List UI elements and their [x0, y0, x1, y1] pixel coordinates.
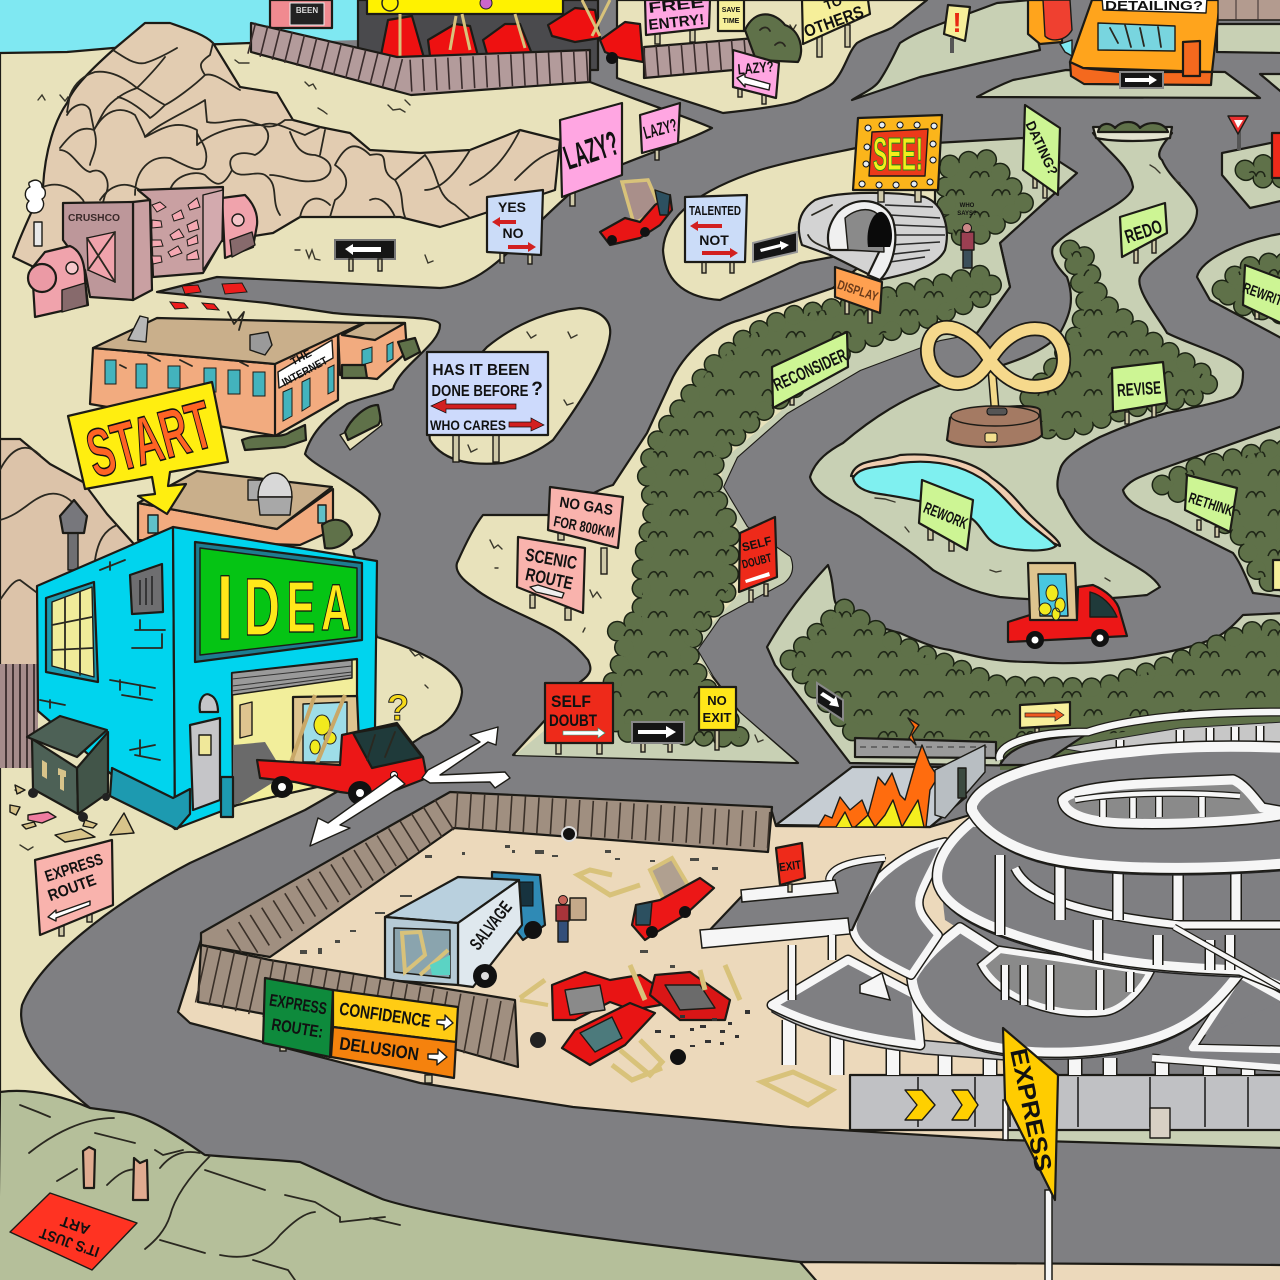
black arrow sign [632, 722, 684, 752]
sign: reconsider: RECONSIDER [770, 345, 850, 395]
mid-road red truck carrying canvas [600, 180, 672, 245]
cream land: west side [0, 43, 712, 1108]
sign: express route pink: ROUTE [46, 872, 99, 905]
sign: small yellow notice: TIME [723, 18, 740, 25]
sign: no gas for 800 km [548, 487, 623, 574]
pale green island under detailing shop [977, 70, 1260, 98]
main upper deck [972, 747, 1280, 920]
idea building [10, 312, 427, 842]
idea sign: D [244, 562, 280, 653]
tunnel drum [799, 193, 947, 280]
sign: display [835, 267, 882, 323]
crusher: CRUSHCO box: CRUSHCO [68, 213, 120, 224]
sign: has it been done before: DONE BEFORE [432, 383, 529, 400]
salvage yard front fence [198, 945, 518, 1067]
sand lot with fire and salvage yard [178, 795, 1020, 1140]
fallen sign: it's just art [10, 1193, 137, 1270]
detailing shop [1028, 0, 1220, 88]
rear deck [1000, 712, 1280, 770]
sign: yield [1228, 116, 1248, 150]
sign: rethink: RETHINK [1186, 490, 1235, 520]
island: rethink [1123, 425, 1280, 597]
wooden frame on the sand [762, 1072, 832, 1105]
window [46, 582, 98, 682]
observatory building behind idea [138, 471, 352, 548]
sign: free entry [645, 0, 710, 44]
sign: exclamation: ! [952, 7, 962, 38]
red truck at start [257, 723, 427, 805]
sign: talented not [685, 195, 747, 273]
fallen sign: it's just art: ART [58, 1212, 92, 1238]
painting on red truck [290, 695, 360, 768]
white road arrows [310, 727, 510, 846]
sand strip bottom right [800, 1262, 1280, 1280]
truck with canvas on the loop [1008, 563, 1127, 649]
hedge: rewrite [1222, 260, 1280, 315]
deck three with opening [912, 928, 1240, 1059]
hedge: tunnel [944, 158, 1025, 236]
sign: free entry: ENTRY! [648, 11, 705, 34]
verge detail lines [20, 1105, 400, 1280]
person by tunnel [957, 203, 977, 268]
salvage worker [556, 896, 586, 942]
sign: small yellow notice: SAVE [722, 7, 741, 14]
hedge: rethink [1162, 446, 1280, 585]
sign: has it been done before: ? [531, 379, 543, 400]
idea sign [195, 542, 362, 662]
sign: self doubt small: SELF [741, 534, 773, 554]
sign: scenic route: SCENIC [524, 544, 579, 573]
sign: revise [1112, 362, 1167, 424]
sign: exit: EXIT [778, 857, 803, 874]
sign: display: DISPLAY [836, 277, 880, 304]
yellow arrow sign [1020, 702, 1070, 736]
dumpster [27, 716, 110, 822]
idea sign: E [286, 568, 316, 648]
sign: no exit: NO [707, 693, 727, 708]
sign: scenic route: ROUTE [524, 564, 575, 594]
left wooden fence [0, 664, 38, 768]
sign: self doubt large: DOUBT [549, 711, 597, 730]
sign: exit [776, 843, 805, 892]
internet building [90, 312, 420, 450]
base trim [110, 768, 190, 829]
sign: revise: REVISE [1116, 377, 1162, 401]
sign: to others [801, 0, 870, 57]
internet building: THE [289, 347, 314, 368]
sign: lazy medium: LAZY? [641, 115, 679, 143]
sign: express route confidence delusion: ROUTE: [270, 1015, 324, 1042]
sign: has it been done before [427, 352, 548, 462]
pale margin right of hedge strip [515, 280, 1008, 762]
salvage yard back fence [201, 792, 772, 957]
express overhead sign [1003, 1028, 1058, 1280]
sign: redo [1120, 203, 1167, 263]
vent [130, 564, 163, 614]
sign: self doubt large [545, 683, 613, 754]
sky [0, 0, 360, 53]
sign: self doubt large: SELF [551, 692, 591, 711]
wreck pile [520, 965, 750, 1080]
yard scattered litter [300, 845, 718, 968]
sign: yes no: NO [502, 225, 524, 241]
deck two [938, 822, 1280, 990]
sign: express route pink [35, 840, 113, 936]
pale strip under highway wall [1005, 1120, 1280, 1148]
hedge: long strip [606, 274, 992, 738]
sign: no exit: EXIT [703, 710, 732, 725]
lamp post [60, 500, 87, 570]
sign: to others: OTHERS [801, 2, 866, 41]
pale green strip north east [1217, 24, 1280, 53]
sign: has it been done before: WHO CARES [430, 417, 506, 433]
sign: scenic route [517, 537, 585, 620]
sign: lazy big: LAZY? [559, 124, 623, 178]
chevrons [905, 1090, 978, 1120]
sign: small yellow notice [718, 0, 744, 31]
concrete wall [850, 1075, 1280, 1138]
green verge bottom left [0, 1091, 820, 1280]
highway interchange [700, 712, 1280, 1138]
top compound: pink booth [270, 0, 332, 28]
fallen sign: it's just art: IT'S JUST [38, 1224, 102, 1260]
sign: no gas for 800 km: NO GAS [558, 494, 614, 519]
top compound: parked red trucks [380, 0, 643, 64]
sign: has it been done before: HAS IT BEEN [432, 362, 530, 379]
wooden frame wreck [578, 870, 640, 895]
planter [1093, 122, 1172, 141]
start sign with arrow [68, 382, 228, 514]
right wall [173, 527, 377, 829]
pond [851, 454, 1060, 550]
sign: lazy big [559, 103, 623, 206]
sign: reconsider [770, 332, 850, 408]
sign: express route confidence delusion: EXPRESS [268, 991, 328, 1018]
internet building: INTERNET [280, 355, 330, 389]
infinity sculpture [927, 327, 1064, 408]
island: pale green behind tunnel [880, 138, 1077, 333]
trash litter [10, 785, 134, 842]
traffic island planter [340, 405, 382, 450]
island: scenic route and long hedge strip [457, 243, 1010, 763]
person by tunnel: SAYS? [957, 211, 977, 217]
garage [232, 659, 357, 806]
island: yield [1222, 140, 1280, 208]
brick marks [40, 560, 165, 760]
broken posts [83, 1147, 148, 1200]
sign: red north east [1272, 133, 1280, 178]
top compound: fence east [644, 38, 756, 78]
top compound: dark hall [358, 0, 598, 70]
door and lamp [190, 694, 233, 817]
sign: express route confidence delusion: DELUSION [338, 1033, 420, 1064]
left hill [0, 439, 135, 700]
sign: see: SEE! [873, 128, 923, 180]
sign: express route confidence delusion: CONFIDENCE [338, 999, 432, 1031]
island: rewrite [1197, 233, 1280, 340]
sign: yes no: YES [498, 199, 526, 215]
deck right low [1152, 975, 1280, 1068]
deck low left [772, 960, 1005, 1060]
small edge sign east [1273, 560, 1280, 590]
sculpture pedestal [947, 406, 1042, 447]
pale green island north [852, 0, 1040, 100]
small black arrow near tunnel [753, 232, 797, 262]
sign: redo: REDO [1122, 217, 1165, 248]
crusher: front motor [28, 222, 88, 317]
sign: lazy small with arrow: LAZY? [737, 58, 774, 79]
sign: rework: REWORK [921, 500, 970, 533]
start sign with arrow: START [79, 387, 220, 493]
grass tufts [15, 25, 1180, 850]
gray fill beneath upper decks [938, 850, 1280, 990]
sign: talented not: NOT [699, 232, 729, 248]
sign: express route confidence delusion [263, 978, 458, 1083]
deck four curved [853, 842, 945, 975]
question mark: ? [387, 687, 409, 728]
sign: self doubt small: DOUBT [741, 550, 773, 571]
top compound: mauve fence [251, 23, 590, 95]
sign: rework [919, 480, 973, 551]
mountain rocks [13, 23, 560, 270]
sign: no gas for 800 km: FOR 800KM [552, 513, 616, 542]
crusher: motor back [222, 195, 257, 258]
cream land: north island [617, 0, 927, 113]
crusher: CRUSHCO box [63, 200, 152, 300]
hedge: revise [1028, 250, 1212, 432]
bush: north [745, 14, 801, 62]
on-ramp [700, 858, 885, 1000]
island: has it been done before [430, 308, 610, 464]
black diagonal arrow sign [817, 683, 843, 720]
island: lower hedge [767, 565, 1280, 770]
sign: dating: DATING? [1022, 118, 1062, 178]
left wall [37, 527, 175, 829]
yard tire [562, 827, 576, 841]
sign: self doubt small [739, 517, 777, 602]
salvage truck: SALVAGE [466, 897, 516, 954]
sign: exclamation [944, 5, 970, 53]
wrecked truck upright [632, 858, 714, 940]
sign: rethink [1185, 475, 1237, 537]
express overhead sign: EXPRESS [1004, 1046, 1057, 1174]
sign: no exit [699, 687, 736, 750]
crusher: perforated hopper [138, 187, 223, 277]
sign: express route pink: EXPRESS [43, 851, 106, 886]
crusher smoke [25, 180, 45, 213]
sign: dating [1022, 105, 1062, 198]
sign: lazy medium [640, 103, 680, 160]
sign: yes no [487, 190, 543, 264]
salvage truck [385, 872, 545, 988]
pillars [789, 1020, 1248, 1075]
black direction arrow: crusher [335, 240, 395, 271]
underpass and fire [776, 718, 996, 827]
fence north east [1218, 0, 1280, 20]
hedge: yield island [1245, 164, 1280, 178]
top compound: pink booth: BEEN [296, 6, 318, 15]
sign: rewrite [1240, 265, 1280, 325]
idea sign: I [217, 557, 233, 659]
idea sign: A [321, 570, 351, 644]
central island: pond and sculpture [810, 133, 1243, 600]
sign: lazy small with arrow [733, 50, 779, 104]
sign: see [853, 115, 942, 202]
person by tunnel: WHO [960, 203, 975, 209]
island: talented and tunnel [663, 143, 943, 300]
sign: talented not: TALENTED [689, 203, 741, 218]
crushed car debris on road [170, 283, 247, 310]
hedge: lower forest [790, 608, 1280, 745]
